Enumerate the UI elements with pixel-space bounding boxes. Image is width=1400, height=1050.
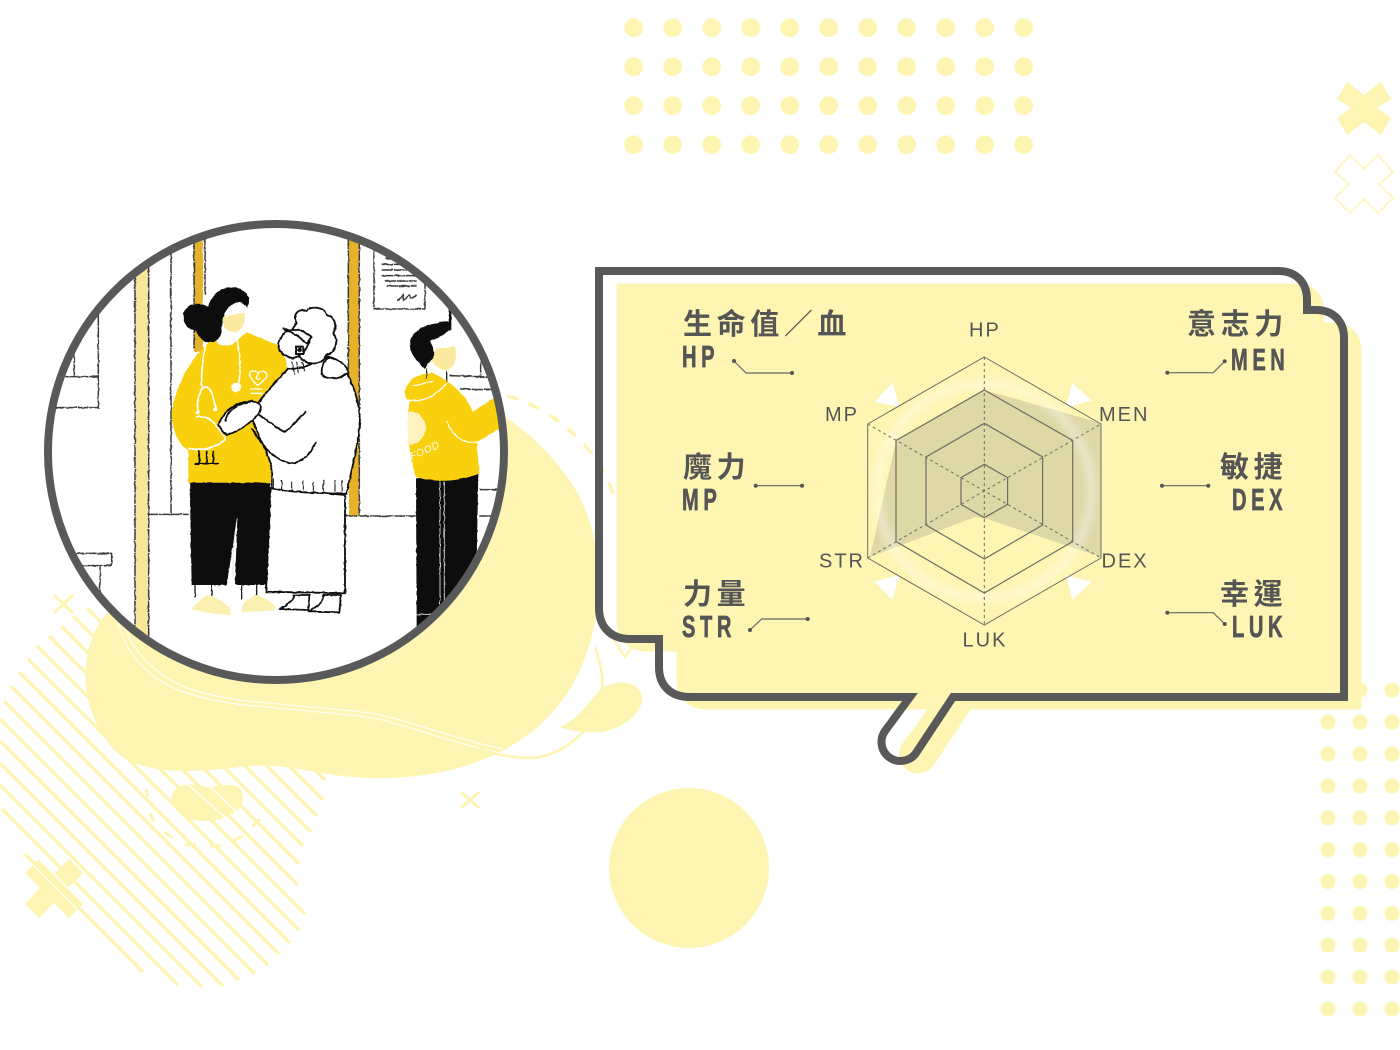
radar: axis labels: DEX: [1102, 551, 1149, 573]
stat label: MP: [682, 451, 804, 517]
stat label: MP: MP: [682, 482, 721, 517]
radar: axis labels: [819, 320, 1149, 652]
illustration: room background: [53, 238, 500, 638]
decoration: white swirl on blob: [118, 621, 503, 753]
dot grid: top: [614, 8, 1043, 164]
decoration: yellow swirl tail: [480, 647, 603, 758]
stat label: LUK: [1165, 578, 1287, 644]
stat label: LUK: LUK: [1232, 609, 1287, 644]
icon: small cross left: [54, 595, 73, 613]
stat label: STR: STR: [682, 609, 736, 644]
radar: data polygon: [870, 390, 1101, 557]
stat label: DEX: DEX: [1232, 482, 1287, 517]
decoration: white stripes over cross and kidney: [30, 782, 243, 918]
decoration: leaf shape: [560, 682, 642, 732]
radar: white triangle marks: [874, 383, 1092, 600]
stat label: HP: [682, 307, 851, 375]
illustration: food delivery worker: [405, 321, 502, 627]
decoration: large yellow circle: [609, 788, 769, 948]
decoration: large organic blob: [85, 417, 599, 778]
radar: soft glow ring: [877, 384, 1091, 598]
radar chart: [819, 320, 1149, 652]
panel: speech bubble outline: [599, 271, 1344, 761]
stat label: MEN: [1165, 308, 1289, 377]
circle frame: [48, 224, 504, 680]
stat label: DEX: 敏捷: [1220, 451, 1287, 484]
stat label: STR: [682, 578, 810, 644]
dot grid: right: [1312, 674, 1400, 1025]
stat label: DEX: [1160, 451, 1287, 517]
radar: axis labels: LUK: [962, 630, 1007, 652]
panel: speech bubble fill: [616, 284, 1362, 774]
icon: solid cross bottom left: [25, 859, 83, 918]
radar: hexagon grid: [868, 357, 1101, 625]
icon: heart logo: [250, 371, 267, 393]
decoration: dashed arc: [507, 396, 616, 504]
radar: axis labels: MEN: [1099, 404, 1149, 426]
radar: axis labels: HP: [969, 320, 1001, 342]
illustration: elderly woman: [218, 308, 360, 612]
icon: solid cross top right: [1337, 82, 1391, 135]
stat label: MEN: 意志力: [1187, 308, 1288, 341]
decoration: diagonal stripes: [0, 608, 325, 987]
illustration: care workers in circle: [50, 226, 502, 678]
decoration: kidney blob with dashed arc: [146, 784, 260, 846]
stat label: HP: 生命值／血: [683, 307, 851, 341]
icon: small cross centre: [461, 792, 479, 808]
radar: axis labels: MP: [825, 404, 859, 426]
stat label: STR: 力量: [683, 578, 750, 611]
radar: axis labels: STR: [819, 551, 865, 573]
stat label: MP: 魔力: [683, 451, 750, 484]
icon: outline cross top right: [1335, 155, 1393, 213]
decoration: small check mark: [613, 638, 632, 657]
illustration: nurse: [172, 287, 288, 615]
stat label: LUK: 幸運: [1220, 578, 1287, 611]
text: FOOD on jacket: FOOD: [408, 440, 442, 463]
stat label: HP: HP: [682, 339, 719, 374]
stat label: MEN: MEN: [1231, 342, 1289, 377]
